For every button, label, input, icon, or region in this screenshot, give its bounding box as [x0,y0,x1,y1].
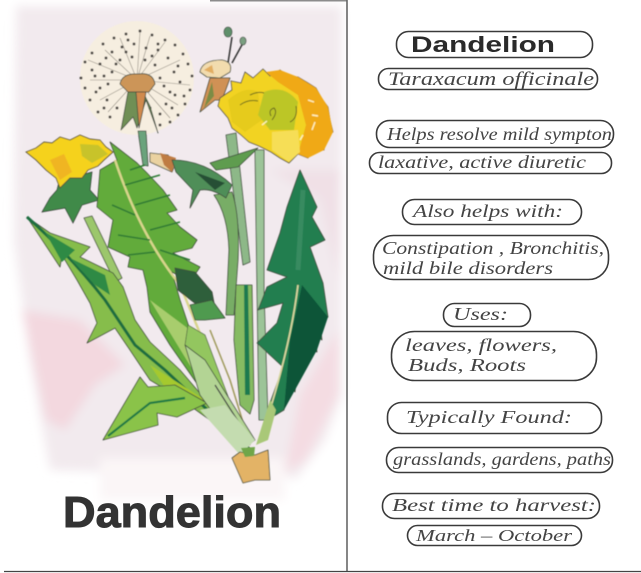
pill: parts used [392,332,596,380]
pill: laxative and diuretic [370,152,612,174]
pill: typically found heading [388,402,602,434]
pill: parts used: leaves, flowers, [405,335,557,355]
pill: also helps with [402,200,582,224]
yellow flower: right [218,69,333,163]
pill: harvest heading: Best time to harvest: [392,495,596,515]
illustration: dandelion plant [26,21,333,483]
pill: uses heading: Uses: [453,304,508,324]
central green stem with dark stripe [185,285,254,445]
sideways bud [150,153,232,208]
pill: harvest heading [382,494,600,518]
title: Dandelion brush lettering: Dandelion [63,488,281,537]
pill: also helps with: Also helps with: [412,201,563,221]
dark green leaf [257,170,328,437]
bottom-left leaf [103,377,207,440]
pill: main benefit: Helps resolve mild sympton [386,124,612,144]
dandelion seed head [80,21,194,166]
pill: habitats [386,448,612,472]
pill: conditions: Constipation , Bronchitis, [382,238,604,258]
central serrated leaf [97,142,250,445]
pink watercolor wash [14,6,342,500]
yellow flower: left [26,135,113,223]
closed bud with stalks [200,27,246,112]
pill: main benefit [376,120,614,148]
pill: typically found heading: Typically Found: [406,407,572,427]
pill: uses heading [444,304,530,326]
root crown [232,447,270,483]
pill: conditions [374,236,608,280]
long lower-left leaf [27,217,250,455]
panel: watercolor illustration [0,0,347,572]
pill: name heading: Dandelion [411,32,555,57]
pill: habitats: grasslands, gardens, paths [393,449,611,469]
leaf stalks at base [185,345,276,455]
pill: parts used: Buds, Roots [408,355,526,375]
panel: plant facts [370,32,614,546]
flower stems [84,133,268,420]
pill: conditions: mild bile disorders [383,258,553,278]
pill: name heading [396,32,592,58]
pill: harvest months [408,526,582,546]
pill: harvest months: March – October [415,526,572,545]
small dark bud [175,268,225,320]
pill: laxative and diuretic: laxative, active diuretic [378,152,586,172]
pill: scientific name: Taraxacum officinale [388,69,594,90]
